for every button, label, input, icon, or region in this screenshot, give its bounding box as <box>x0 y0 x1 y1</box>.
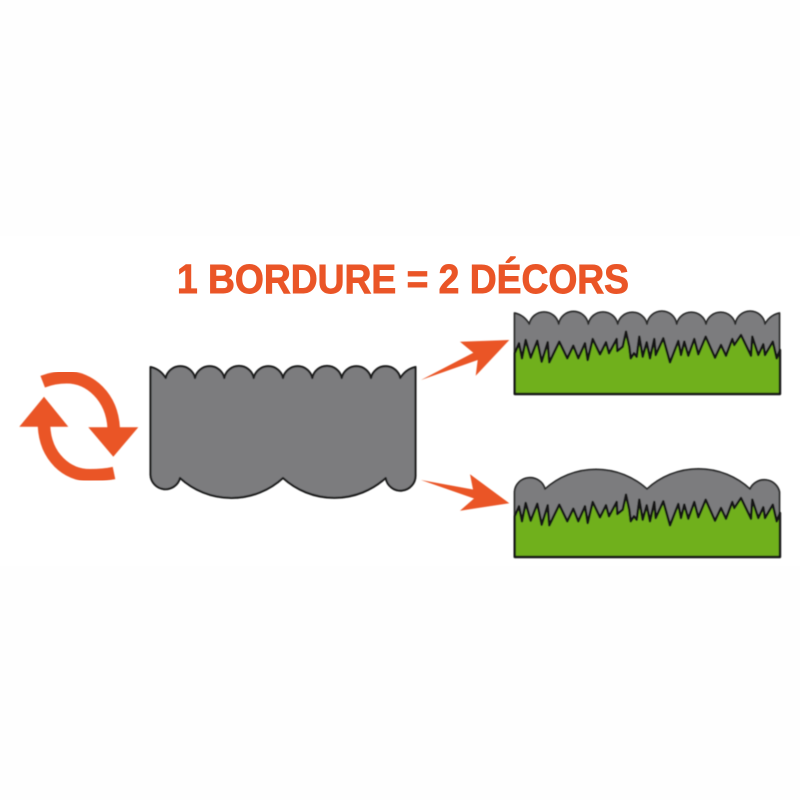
panel: scalloped decor with grass <box>514 311 780 394</box>
scalloped border top <box>514 311 780 392</box>
icon: reversible rotation arrows <box>19 377 138 475</box>
title: 1 BORDURE = 2 DÉCORS <box>177 256 629 302</box>
grass <box>515 495 780 557</box>
reversible border shape <box>150 366 416 498</box>
arrow: to scalloped decor <box>421 340 509 380</box>
grass <box>515 332 780 394</box>
arrow: to rounded decor <box>421 474 509 511</box>
panel: rounded decor with grass <box>514 469 780 557</box>
rounded border top <box>514 469 780 555</box>
